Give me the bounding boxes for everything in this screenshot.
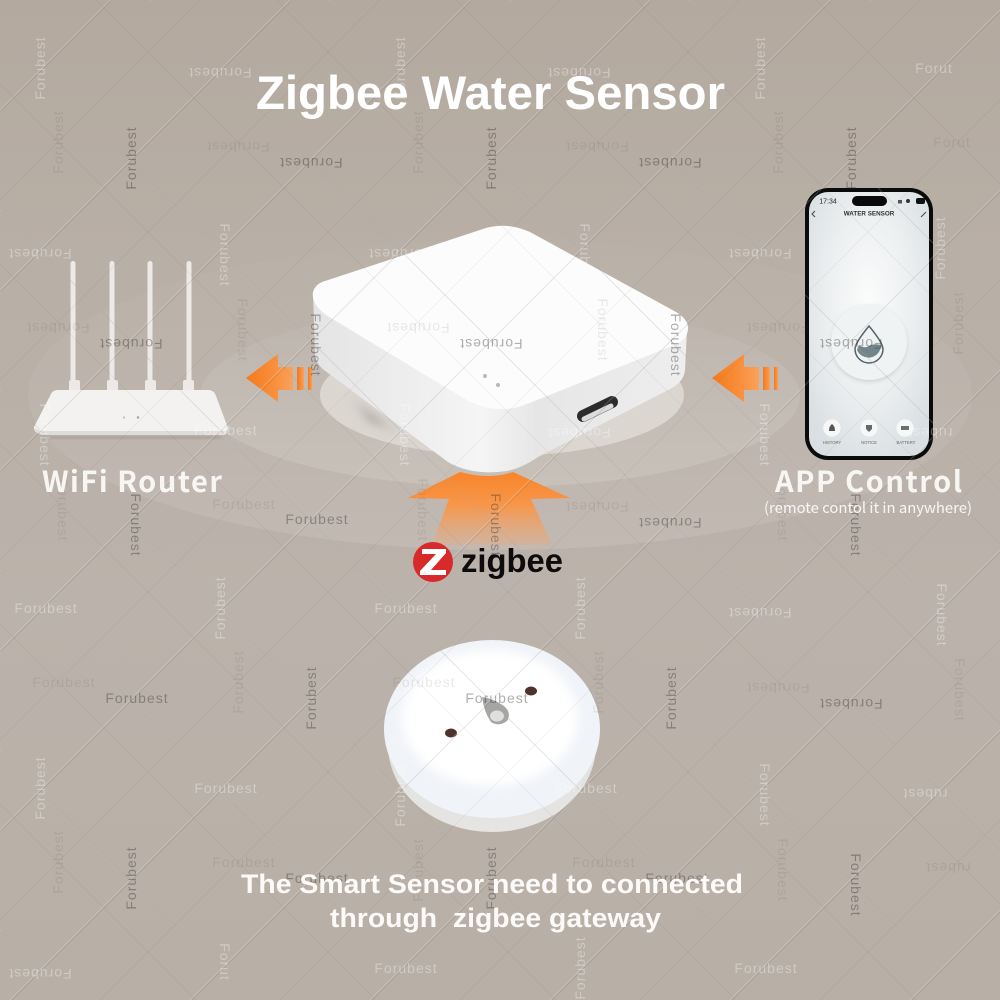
watermarks: Forubest [8, 246, 72, 262]
watermarks: Forubest [819, 336, 883, 352]
watermarks: Forubest [368, 246, 432, 262]
status bar: 17:34 [819, 198, 837, 206]
zigbee icon [413, 542, 453, 582]
watermarks: Forubest [308, 313, 324, 377]
watermarks: Forubest [746, 320, 810, 336]
watermarks: Forubest [32, 756, 48, 820]
watermarks: Forubest [668, 313, 684, 377]
icon: wifi router [34, 261, 228, 439]
watermarks: Forubest [595, 298, 611, 362]
watermarks: Forubest [212, 854, 276, 870]
status bar: WATER SENSOR [844, 210, 895, 218]
watermarks: Forubest [26, 320, 90, 336]
watermarks: Forubest [415, 478, 431, 542]
sensor drop logo [482, 697, 509, 724]
watermarks: Forubest [483, 126, 499, 190]
watermarks: Forubest [848, 853, 864, 917]
watermarks: Forubest [843, 126, 859, 190]
watermarks: Forubest [488, 493, 504, 557]
watermarks: Forubest [285, 870, 349, 886]
watermarks: Forubest [235, 298, 251, 362]
watermarks: Forubest [374, 960, 438, 976]
watermarks: Forubest [577, 223, 593, 287]
status bar [819, 198, 925, 218]
back and edit icons [812, 211, 926, 217]
watermarks: Forubest [565, 139, 629, 155]
watermarks: Forubest [734, 960, 798, 976]
watermarks: Forubest [55, 478, 71, 542]
caption: through zigbee gateway [330, 903, 661, 933]
label: wifi router: WiFi Router [42, 459, 222, 501]
watermarks: Forubest [645, 870, 709, 886]
watermarks: Forubest [392, 763, 408, 827]
app bottom buttons: NOTICE [861, 440, 877, 445]
watermarks: Forubest [386, 320, 450, 336]
icon: water sensor puck [384, 640, 600, 832]
caption [241, 869, 743, 933]
watermarks: Forubest [547, 65, 611, 81]
watermarks: Forubest [638, 515, 702, 531]
watermarks: Forubest [746, 680, 810, 696]
watermarks: Forubest [775, 478, 791, 542]
watermarks: Forubest [728, 246, 792, 262]
title: Zigbee Water Sensor [256, 66, 725, 119]
watermarks: Forubest [212, 576, 228, 640]
sensor probes [445, 686, 537, 738]
icon: zigbee gateway hub [313, 226, 688, 472]
sub-label: remote control: (remote contol it in anywhere) [764, 497, 972, 518]
watermarks: Forubest [410, 110, 426, 174]
watermarks: Forubest [123, 846, 139, 910]
watermarks: Forut [915, 60, 953, 76]
watermarks: Forubest [50, 830, 66, 894]
watermarks: Forut [217, 943, 233, 981]
watermarks: Forubest [848, 493, 864, 557]
watermarks: Forubest [50, 110, 66, 174]
watermarks: Forubest [932, 216, 948, 280]
watermarks: Forubest [8, 966, 72, 982]
watermarks: Forubest [638, 155, 702, 171]
watermarks: Forubest [590, 650, 606, 714]
watermarks: Forubest [572, 576, 588, 640]
concentric signal ellipses [28, 240, 972, 550]
watermarks: Forubest [374, 600, 438, 616]
watermarks: Forubest [128, 493, 144, 557]
watermarks: Forubest [770, 110, 786, 174]
watermarks: Forubest [572, 936, 588, 1000]
watermarks: Forubest [465, 690, 529, 706]
watermarks: Forubest [728, 605, 792, 621]
watermarks: Forubest [952, 658, 968, 722]
watermarks: Forubest [206, 139, 270, 155]
watermarks: Forubest [194, 422, 258, 438]
arrow: hub to router [246, 354, 312, 402]
watermarks: Forubest [37, 403, 53, 467]
app bottom buttons: BATTERY [897, 440, 916, 445]
watermarks: Forubest [410, 838, 426, 902]
watermarks: rubest [908, 425, 952, 441]
watermarks: Forubest [188, 65, 252, 81]
phone notch [852, 196, 887, 206]
app bottom buttons [823, 419, 916, 445]
watermarks: Forubest [757, 763, 773, 827]
watermarks: Forubest [285, 511, 349, 527]
watermarks: Forubest [14, 600, 78, 616]
watermarks: rubest [903, 786, 947, 802]
watermarks: Forubest [663, 666, 679, 730]
watermarks: Forubest [392, 674, 456, 690]
app water dial [831, 304, 907, 382]
watermarks: Forubest [303, 666, 319, 730]
usb port [583, 402, 612, 419]
zigbee logo: zigbee [461, 542, 563, 579]
watermarks: Forubest [459, 336, 523, 352]
watermarks: Forubest [483, 846, 499, 910]
arrow: phone to hub [712, 354, 778, 402]
watermarks: Forubest [392, 36, 408, 100]
watermarks: Forubest [212, 496, 276, 512]
watermarks: Forubest [752, 36, 768, 100]
watermarks: Forubest [950, 291, 966, 355]
watermarks: Forubest [99, 336, 163, 352]
watermarks: Forubest [105, 690, 169, 706]
watermarks: Forubest [217, 223, 233, 287]
caption: The Smart Sensor need to connected [241, 869, 743, 899]
watermarks: Forubest [757, 403, 773, 467]
status LEDs [483, 374, 500, 387]
icon: phone with app [805, 188, 933, 460]
watermarks: Forubest [32, 674, 96, 690]
watermarks: Forubest [554, 780, 618, 796]
app bottom buttons: HISTORY [823, 440, 841, 445]
label: app control [764, 459, 972, 518]
arrow: zigbee signal up [408, 472, 570, 545]
watermarks: Forubest [194, 780, 258, 796]
watermarks: rubest [926, 860, 970, 876]
watermarks: Forubest [775, 838, 791, 902]
watermarks: Forubest [934, 583, 950, 647]
watermarks: Forubest [123, 126, 139, 190]
watermarks: Forubest [819, 696, 883, 712]
watermarks: Forubest [279, 155, 343, 171]
watermarks: Forubest [565, 499, 629, 515]
watermarks: Forubest [547, 425, 611, 441]
watermarks: Forubest [32, 36, 48, 100]
watermarks: Forut [933, 134, 971, 150]
zigbee logo [413, 542, 563, 582]
watermarks: Forubest [572, 854, 636, 870]
watermarks: Forubest [397, 403, 413, 467]
label: app control: APP Control [774, 459, 962, 501]
watermarks: Forubest [230, 650, 246, 714]
